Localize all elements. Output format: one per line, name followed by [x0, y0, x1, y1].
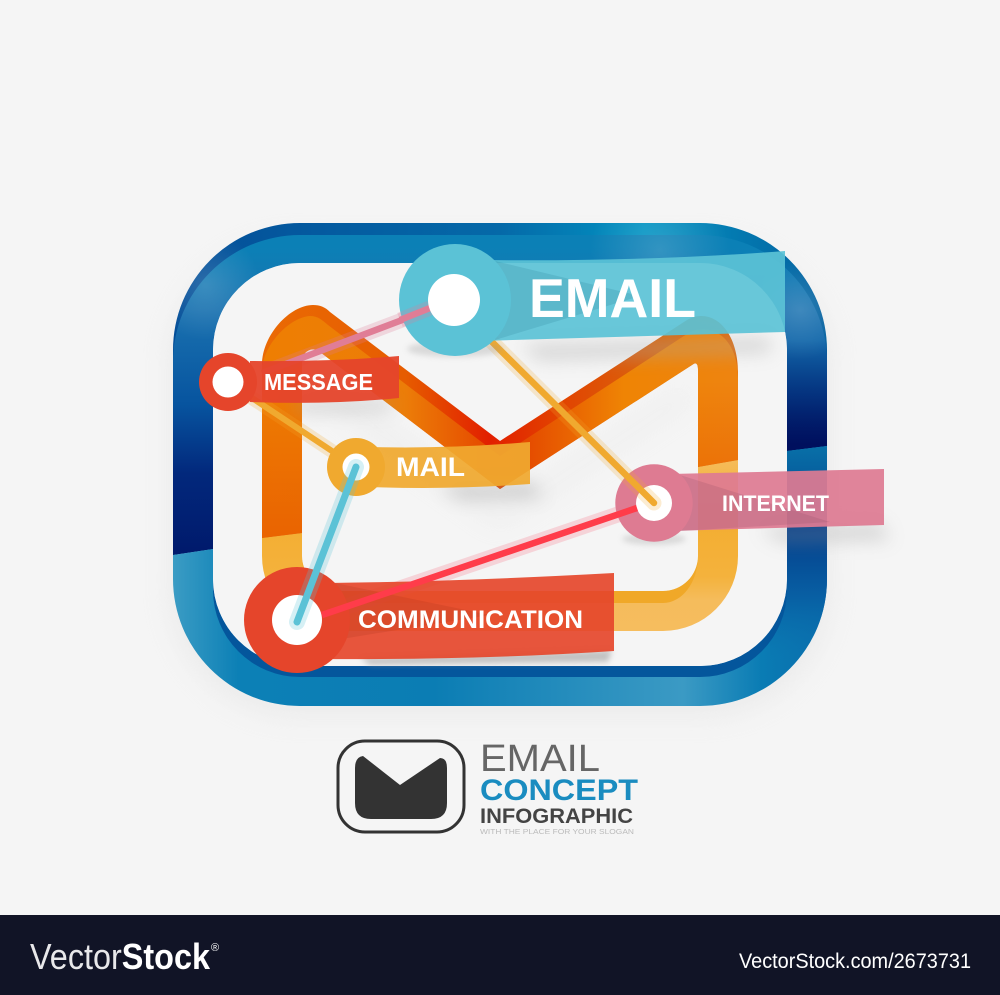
- rounded blue frame: [173, 223, 827, 706]
- inner panel: [213, 263, 787, 666]
- label: email: [480, 251, 785, 341]
- mail ribbon: [370, 442, 530, 488]
- connector: email to message: [262, 300, 455, 373]
- connector: email to internet: [470, 320, 654, 503]
- communication ribbon: [320, 573, 614, 659]
- envelope lower yellow segment: [262, 460, 738, 631]
- label: mail: [370, 442, 530, 488]
- ribbon fold shade: [335, 583, 490, 640]
- footer bar: [0, 915, 1000, 995]
- label: communication: [320, 573, 614, 659]
- node: mail: [327, 438, 385, 496]
- frame upper segment: [173, 223, 827, 555]
- message text: MESSAGE: [264, 369, 373, 395]
- connector: mail to communication: [297, 467, 356, 622]
- communication text: COMMUNICATION: [358, 606, 583, 634]
- orange envelope: [262, 305, 738, 631]
- ring frame soft shadow: [170, 240, 830, 716]
- connector: communication to internet: [322, 508, 637, 615]
- label shadows: [290, 338, 890, 665]
- slogan: WITH THE PLACE FOR YOUR SLOGAN: [480, 827, 634, 836]
- footer registered mark: ®: [211, 942, 219, 954]
- label: message: [250, 356, 399, 403]
- ribbon fold shade: [495, 261, 640, 340]
- title: email: EMAIL: [480, 738, 600, 780]
- footer brand: VectorStock: [30, 936, 211, 977]
- node: internet: [615, 464, 693, 545]
- connector halo: communication to internet: [322, 508, 637, 615]
- label: internet: [670, 469, 884, 531]
- connector halo over node: [400, 308, 430, 320]
- title: infographic: INFOGRAPHIC: [480, 805, 633, 828]
- node: communication: [244, 567, 350, 673]
- envelope soft shadow: [310, 370, 690, 525]
- logo icon: envelope in rounded frame: [338, 741, 464, 832]
- frame lower segment: [173, 446, 827, 706]
- node: email: [399, 244, 511, 357]
- message ribbon: [250, 356, 399, 403]
- ribbon fold shade: [680, 475, 830, 531]
- email ribbon: [480, 251, 785, 341]
- title: concept: CONCEPT: [480, 774, 638, 807]
- mail text: MAIL: [396, 452, 465, 482]
- connector: message to mail: [228, 382, 356, 467]
- internet ribbon: [670, 469, 884, 531]
- logo title block: [480, 738, 638, 836]
- email text: EMAIL: [529, 267, 696, 329]
- envelope upper flap: [262, 305, 738, 538]
- footer image id: VectorStock.com/2673731: [739, 950, 971, 973]
- internet text: INTERNET: [722, 491, 830, 516]
- node: message: [199, 353, 257, 411]
